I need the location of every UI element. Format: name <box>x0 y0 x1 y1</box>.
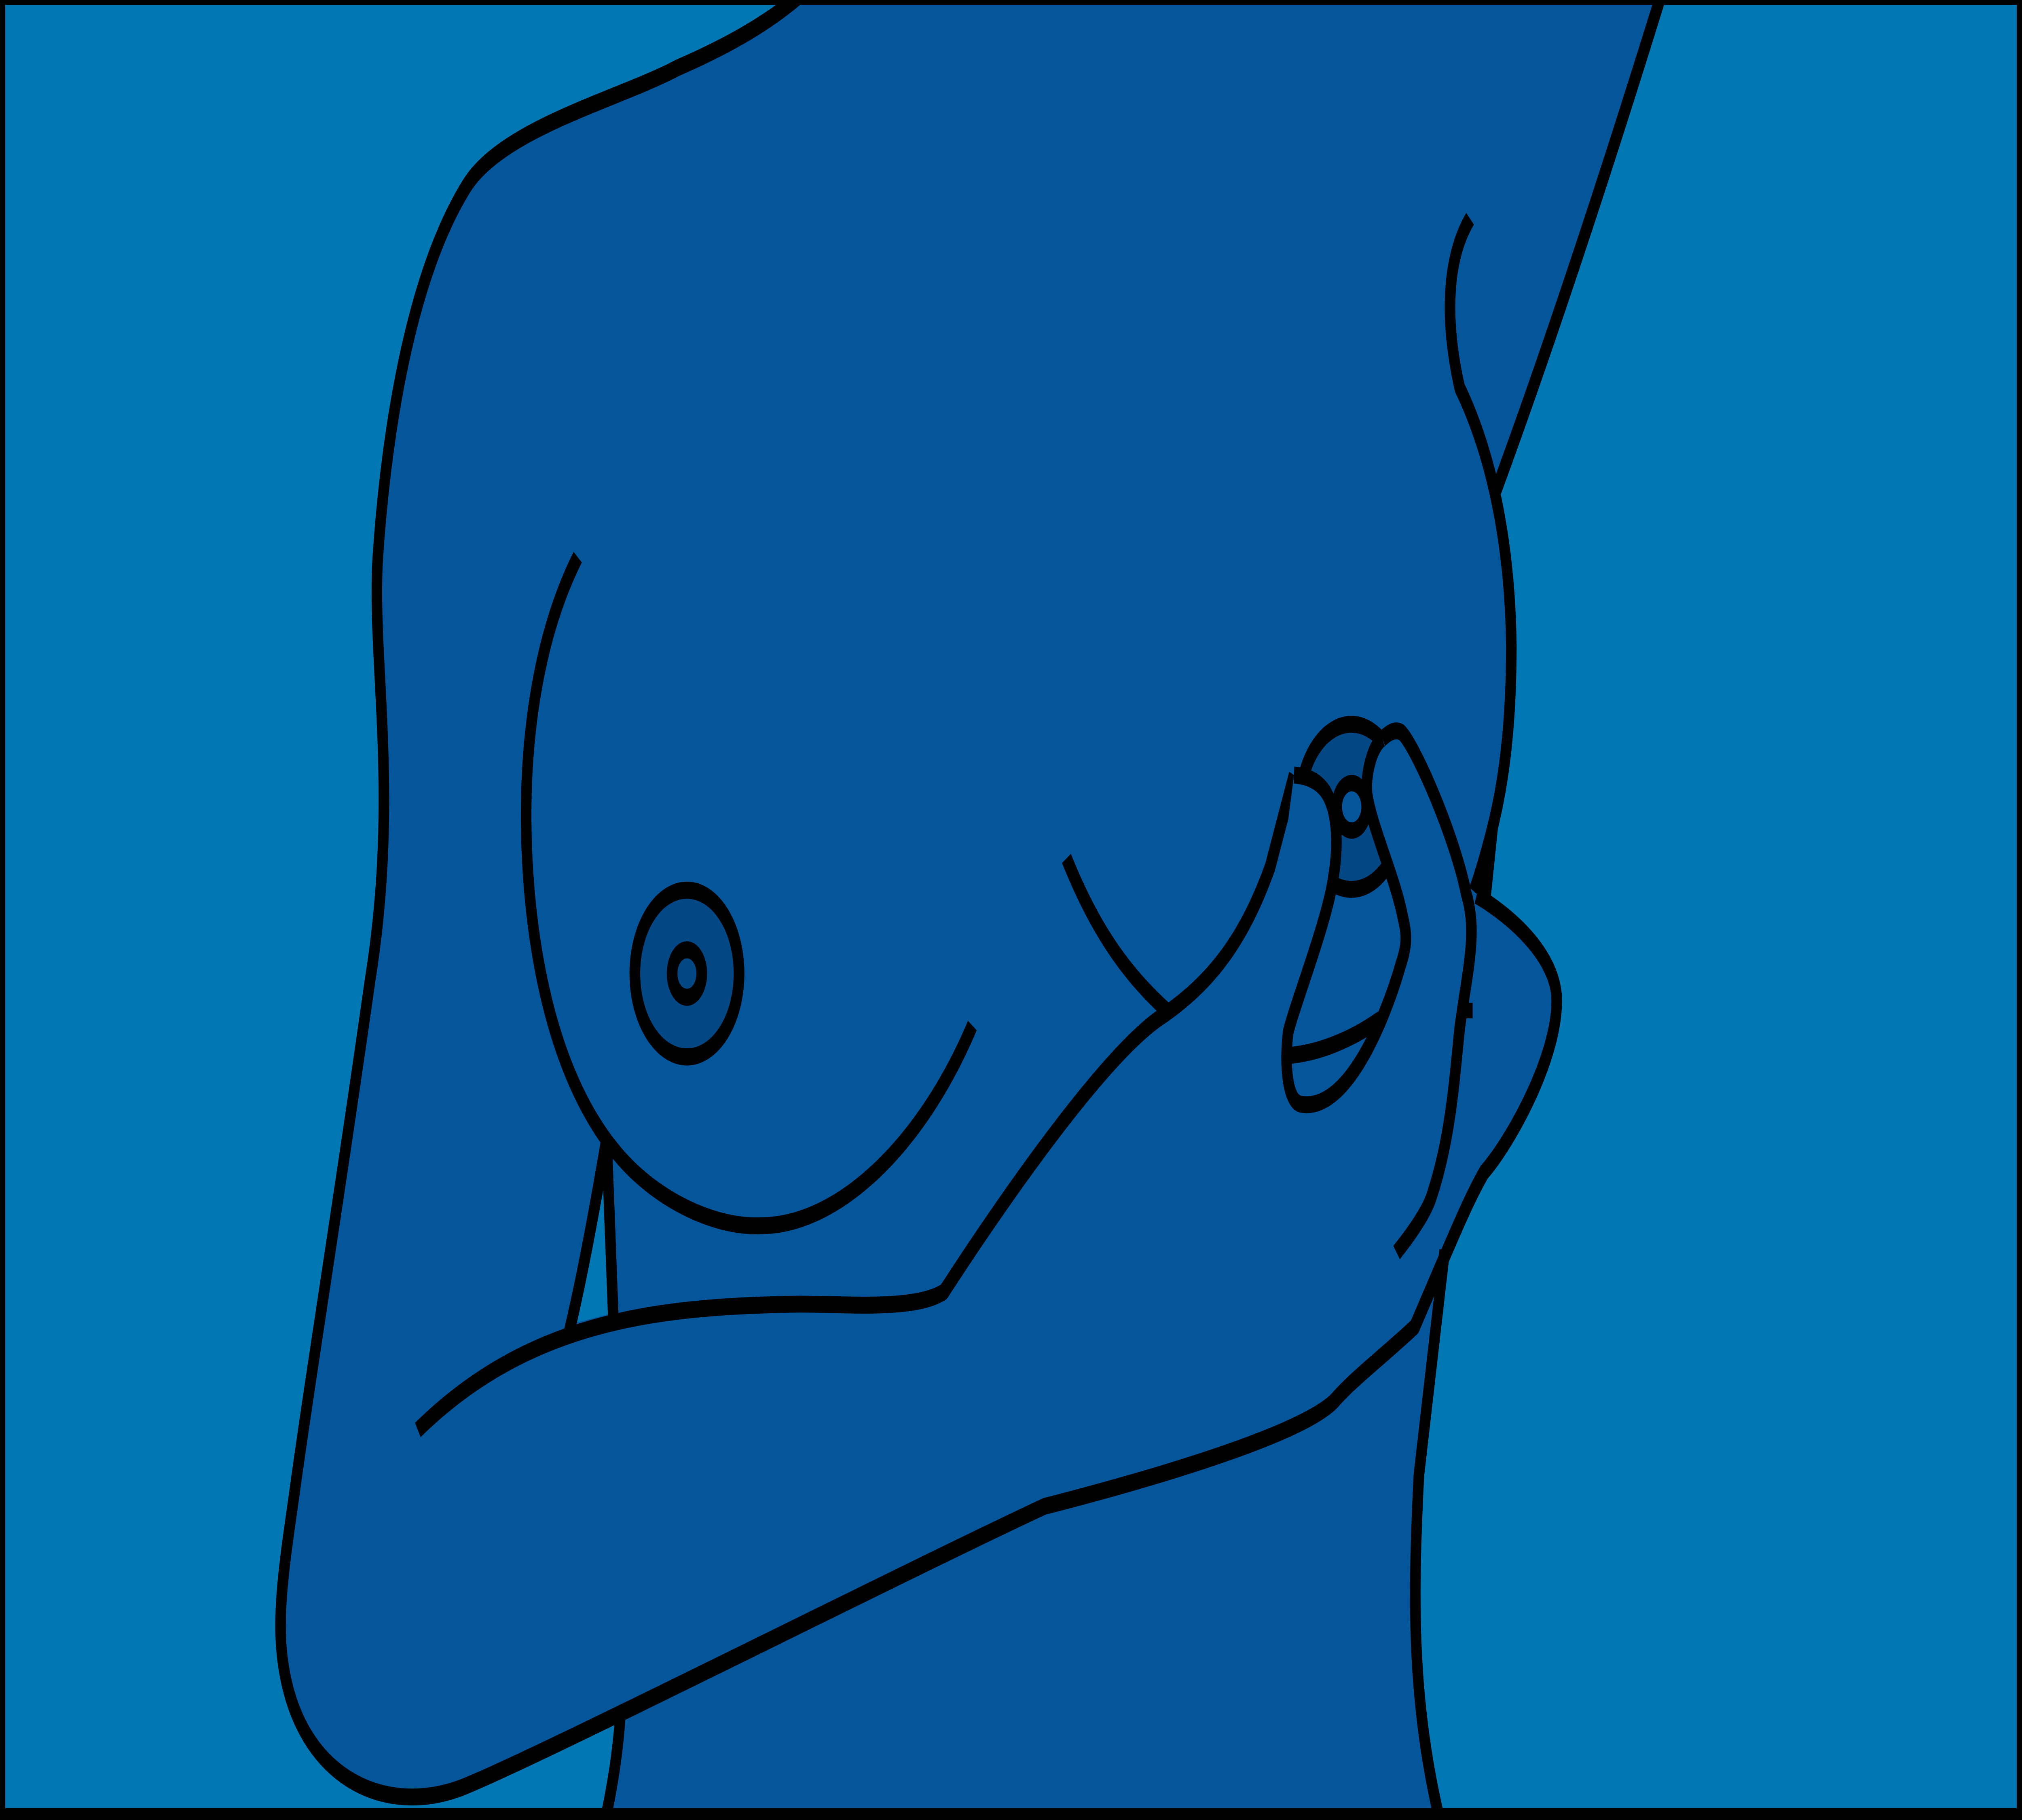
right breast lower crease <box>1066 858 1170 1013</box>
right nipple <box>1337 783 1366 831</box>
second fingertip fill <box>1367 731 1457 918</box>
left breast contour <box>526 557 972 1226</box>
left nipple <box>672 950 702 997</box>
armpit right line <box>607 1139 613 1321</box>
index fingertip fill <box>1277 775 1337 908</box>
forearm top line <box>418 775 1294 1430</box>
shoulder, side, elbow and forearm outline <box>281 0 1557 1797</box>
lower left torso edge <box>606 1717 620 1816</box>
outer finger and palm outline <box>1382 731 1472 1253</box>
armpit left line <box>569 1139 607 1335</box>
inner finger outline <box>1287 739 1406 1105</box>
lower right torso edge <box>1415 1251 1445 1812</box>
left areola <box>635 890 739 1057</box>
finger outlines <box>1287 731 1472 1253</box>
body outlines <box>281 0 1661 1816</box>
hand <box>1277 731 1473 1253</box>
right breast outer contour <box>1450 219 1511 891</box>
torso and arm silhouette <box>281 0 1661 1820</box>
upper right torso edge <box>1496 0 1661 491</box>
finger knuckle line <box>1290 1019 1380 1056</box>
left areola and nipple <box>635 890 739 1057</box>
armpit gap <box>576 1190 608 1323</box>
breast shadow wedge <box>1475 830 1498 902</box>
right areola <box>1300 724 1403 889</box>
knuckle tab <box>1464 1003 1473 1018</box>
